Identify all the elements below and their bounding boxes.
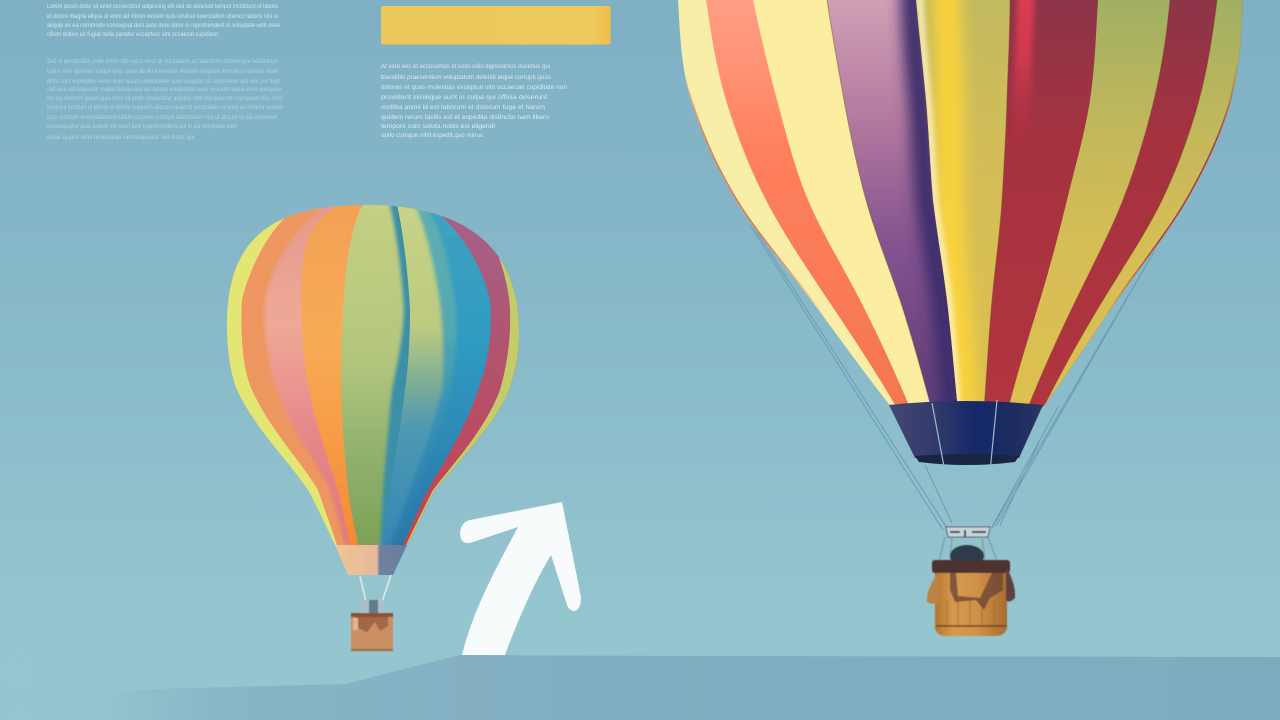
text block: left body paragraph: quis nostrum exercitationem ullam corporis suscipit laboriosam nisi ut aliquid ex ea commodi xyxy=(47,115,277,121)
text block: left body paragraph: totam rem aperiam eaque ipsa quae ab illo inventore veritatis et quasi architecto beatae vitae xyxy=(47,69,279,75)
text block: top left paragraph: cillum dolore eu fugiat nulla pariatur excepteur sint occaecat cupidatat xyxy=(47,32,218,38)
text block: centre paragraph: dolores et quas molestias excepturi sint occaecati cupiditate non xyxy=(381,85,567,91)
large balloon basket xyxy=(927,527,1015,636)
small balloon envelope xyxy=(227,205,520,545)
text block: centre paragraph: quidem rerum facilis est et expedita distinctio nam libero xyxy=(381,115,550,121)
white upward arrow xyxy=(460,502,581,655)
text block: top left paragraph: Lorem ipsum dolor sit amet consectetur adipiscing elit sed do eiusmod tempor incididunt ut labore xyxy=(47,4,279,10)
large balloon envelope xyxy=(670,0,1280,420)
text block: top left paragraph: aliquip ex ea commodo consequat duis aute irure dolor in reprehenderit in voluptate velit esse xyxy=(47,23,281,29)
wicker body xyxy=(935,572,1007,636)
halftone dot texture xyxy=(0,600,170,720)
text block: left body paragraph: est qui dolorem ipsum quia dolor sit amet consectetur adipisci velit sed quia non numquam eius modi xyxy=(47,96,283,102)
seam lines xyxy=(827,0,1217,410)
text block: left body paragraph xyxy=(47,59,283,141)
basket straps and bags xyxy=(950,573,1003,610)
text block: centre paragraph: optio cumque nihil impedit quo minus xyxy=(381,133,483,139)
text block: centre paragraph: tempore cum soluta nobis est eligendi xyxy=(381,124,495,130)
burner frame xyxy=(939,527,997,567)
text block: left body paragraph: consequatur quis autem vel eum iure reprehenderit qui in ea voluptate velit xyxy=(47,124,237,130)
small balloon basket xyxy=(351,600,393,651)
text block: centre paragraph: blanditiis praesentium voluptatum deleniti atque corrupti quos xyxy=(381,75,551,81)
text block: left body paragraph: tempora incidunt ut labore et dolore magnam aliquam quaerat voluptatem ut enim ad minima veniam xyxy=(47,105,283,111)
text block: left body paragraph: Sed ut perspiciatis unde omnis iste natus error sit voluptatem accusantium doloremque laudantium xyxy=(47,59,278,65)
text block: left body paragraph: sed quia consequuntur magni dolores eos qui ratione voluptatem sequi nesciunt neque porro quisquam xyxy=(47,87,282,93)
text block: top left paragraph: et dolore magna aliqua ut enim ad minim veniam quis nostrud exercitation ullamco laboris nisi ut xyxy=(47,14,278,20)
ground hill xyxy=(100,655,1280,720)
text block: centre paragraph xyxy=(381,64,567,139)
small striped balloon xyxy=(227,205,520,652)
yellow stripe highlight xyxy=(919,0,963,420)
text block: centre paragraph: At vero eos et accusamus et iusto odio dignissimos ducimus qui xyxy=(381,64,550,70)
text block: left body paragraph: esse quam nihil molestiae consequatur vel illum qui xyxy=(47,135,195,141)
yellow heading bar xyxy=(381,6,610,44)
text block: top left paragraph xyxy=(47,4,281,38)
basket dark rim xyxy=(932,560,1010,573)
text block: centre paragraph: mollitia animi id est laborum et dolorum fuga et harum xyxy=(381,105,545,111)
large balloon navy skirt xyxy=(889,401,1043,465)
wicker slats xyxy=(947,600,994,626)
small balloon ropes xyxy=(360,575,391,602)
text block: left body paragraph: dicta sunt explicabo nemo enim ipsam voluptatem quia voluptas sit aspernatur aut odit aut fugit xyxy=(47,79,280,85)
purple stripe shadow xyxy=(912,0,954,420)
centre suspension cables xyxy=(932,400,997,525)
text block: centre paragraph: provident similique sunt in culpa qui officia deserunt xyxy=(381,95,547,101)
envelope edge tint xyxy=(680,60,1238,332)
large striped balloon xyxy=(670,0,1280,636)
crimson stripe glint xyxy=(1020,0,1026,150)
small balloon skirt xyxy=(335,545,407,575)
large balloon rigging ropes xyxy=(750,225,1155,530)
